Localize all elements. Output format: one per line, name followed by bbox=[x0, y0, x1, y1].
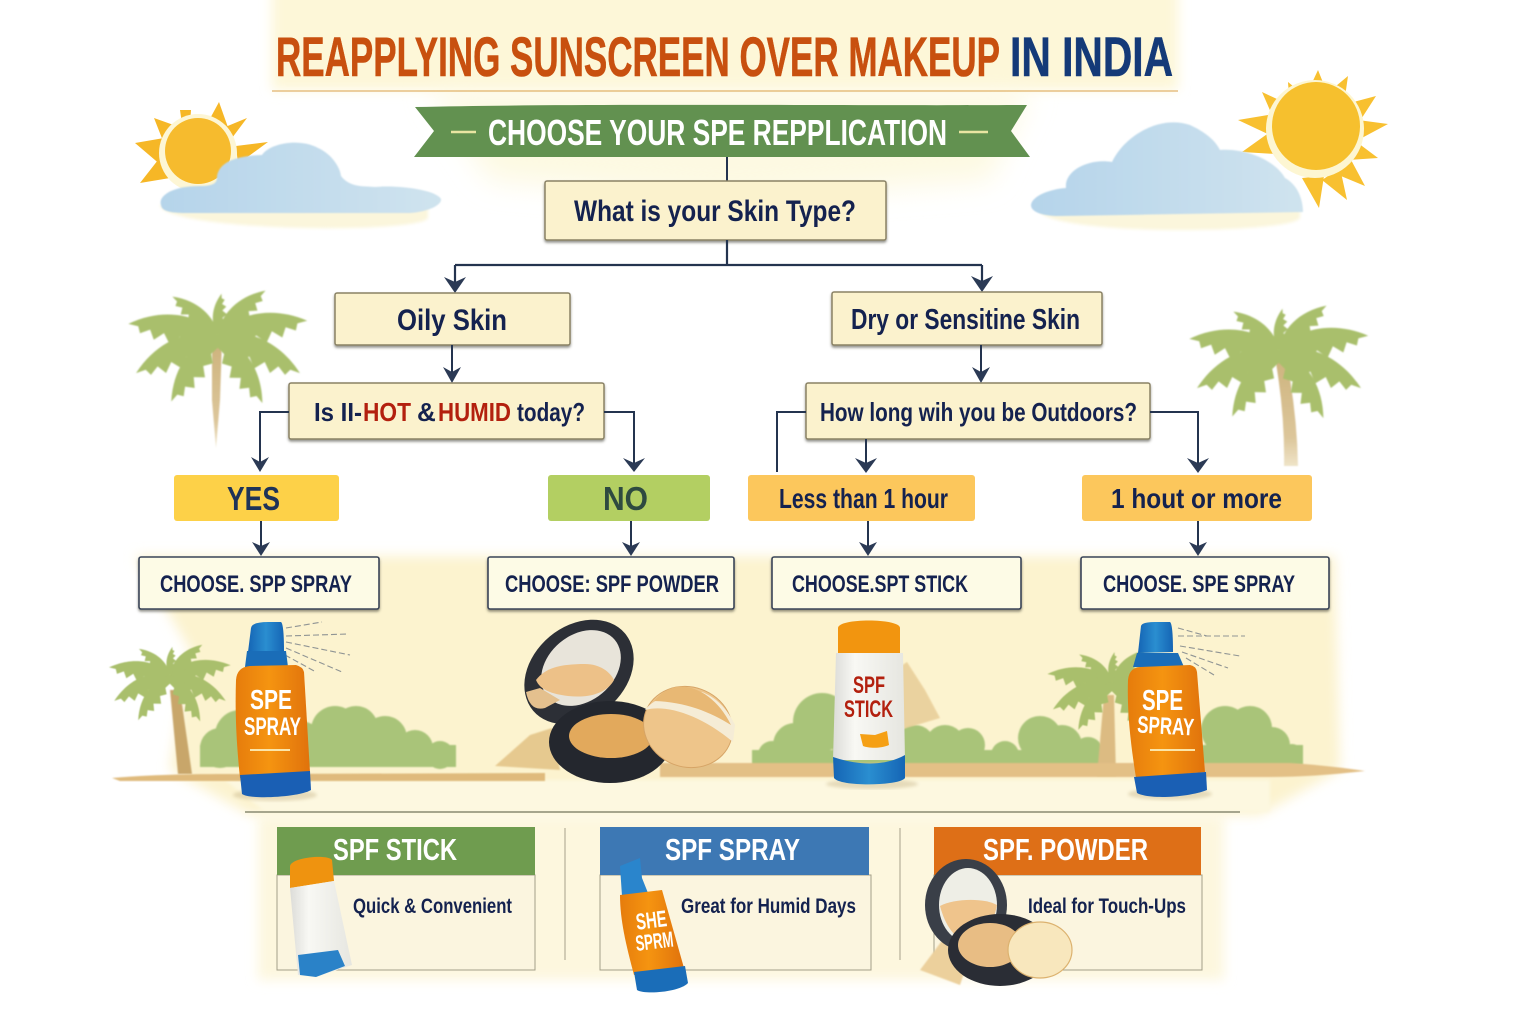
box: dry or sensitive skin: Dry or Sensitine Skin bbox=[851, 304, 1080, 336]
background wash: header bbox=[272, 0, 1178, 200]
result box: spray: CHOOSE. SPP SPRAY bbox=[160, 571, 352, 598]
result box: stick: CHOOSE.SPT STICK bbox=[792, 571, 968, 598]
result box: spray bbox=[139, 557, 379, 609]
product: powder compact bbox=[503, 598, 744, 783]
icon: right cloud bbox=[1031, 122, 1303, 230]
icon: palm tree upper right bbox=[1189, 299, 1370, 466]
arrow: to yes bbox=[251, 412, 289, 472]
label: no: NO bbox=[603, 480, 648, 517]
icon: compact bbox=[920, 859, 1072, 986]
box: dry or sensitive skin bbox=[832, 292, 1102, 345]
arrow: yes to spray bbox=[252, 521, 270, 556]
result box: stick bbox=[772, 557, 1021, 609]
icon: spray bbox=[620, 858, 688, 992]
shelf ledge bbox=[112, 728, 1365, 812]
label: less than 1 hour: Less than 1 hour bbox=[779, 483, 948, 514]
card: SPF spray bbox=[600, 827, 871, 992]
product: spray left: SPE bbox=[250, 684, 292, 715]
question box: hot and humid bbox=[289, 383, 604, 439]
question box: outdoors: How long wih you be Outdoors? bbox=[820, 397, 1137, 427]
dividers between summary cards bbox=[565, 828, 900, 960]
product: spray left: SPRAY bbox=[244, 713, 301, 741]
card: SPF powder: SPF. POWDER bbox=[983, 832, 1148, 867]
icon: stick bbox=[290, 857, 352, 977]
product: SPF stick bbox=[826, 620, 918, 789]
icon: spray: SPRM bbox=[634, 927, 675, 956]
arrow: oily to humid question bbox=[443, 345, 461, 383]
result box: spray right: CHOOSE. SPE SPRAY bbox=[1103, 571, 1295, 598]
icon: right sun bbox=[1238, 70, 1388, 208]
title: IN INDIA bbox=[1010, 25, 1173, 88]
result box: spray right bbox=[1081, 557, 1329, 609]
card: SPF spray: SPF SPRAY bbox=[665, 832, 800, 867]
title: REAPPLYING SUNSCREEN OVER MAKEUP bbox=[276, 25, 1000, 88]
result box: powder: CHOOSE: SPF POWDER bbox=[505, 571, 719, 598]
banner: choose your SPF application bbox=[414, 105, 1030, 157]
question box: skin type: What is your Skin Type? bbox=[574, 195, 856, 228]
card: SPF stick: Quick & Convenient bbox=[353, 895, 512, 918]
card: SPF stick bbox=[277, 827, 535, 977]
card: SPF powder bbox=[920, 827, 1202, 986]
arrow: skin type branches bbox=[444, 240, 993, 293]
card: SPF stick: SPF STICK bbox=[333, 832, 457, 867]
icon: left sun bbox=[135, 102, 268, 192]
icon: spray: SHE bbox=[634, 905, 668, 935]
question box: skin type bbox=[545, 181, 886, 240]
hill behind stick bbox=[895, 662, 940, 730]
arrow: no to powder bbox=[622, 521, 640, 556]
product: spray right bbox=[1128, 622, 1245, 800]
product: SPF stick: STICK bbox=[844, 696, 893, 723]
icon: palm tree lower left bbox=[109, 641, 232, 774]
arrow: less than hour to stick bbox=[859, 521, 877, 556]
icon: palm tree lower right bbox=[1047, 646, 1177, 776]
card: SPF powder: Ideal for Touch-Ups bbox=[1028, 895, 1186, 918]
product: SPF stick: SPF bbox=[853, 672, 885, 699]
card: SPF spray: Great for Humid Days bbox=[681, 895, 856, 918]
arrow: to 1 hour or more bbox=[1150, 412, 1209, 473]
product: spray right: SPRAY bbox=[1137, 712, 1195, 742]
label: 1 hour or more: 1 hout or more bbox=[1111, 483, 1282, 514]
label: 1 hour or more bbox=[1082, 475, 1312, 521]
background wash: landscape bbox=[135, 556, 1340, 815]
connector: banner to skin type question bbox=[726, 157, 728, 181]
connector: outdoors left line bbox=[777, 412, 806, 472]
question box: hot and humid: Is II- bbox=[314, 397, 362, 427]
question box: hot and humid: today? bbox=[517, 397, 585, 427]
label: no bbox=[548, 475, 710, 521]
arrow: more than hour to spray bbox=[1189, 521, 1207, 556]
background wash: bottom cards bbox=[258, 815, 1224, 980]
bushes bbox=[200, 693, 1303, 769]
icon: left cloud bbox=[160, 143, 441, 228]
arrow: dry to outdoors question bbox=[972, 345, 990, 383]
box: oily skin: Oily Skin bbox=[397, 304, 507, 337]
product: spray right: SPE bbox=[1142, 685, 1183, 717]
icon: palm tree upper left bbox=[128, 284, 309, 448]
question box: hot and humid: HUMID bbox=[438, 397, 511, 427]
box: oily skin bbox=[335, 293, 570, 345]
result box: powder bbox=[488, 557, 734, 609]
question box: outdoors bbox=[806, 383, 1150, 439]
label: less than 1 hour bbox=[748, 475, 975, 521]
label: yes bbox=[174, 475, 339, 521]
question box: hot and humid: HOT bbox=[363, 397, 411, 427]
arrow: to less than 1 hour bbox=[855, 439, 877, 473]
banner: choose your SPF application: CHOOSE YOUR SPE REPPLICATION bbox=[488, 112, 947, 153]
arrow: to no bbox=[604, 412, 645, 472]
product: spray left bbox=[233, 622, 350, 801]
label: yes: YES bbox=[227, 480, 280, 517]
question box: hot and humid: & bbox=[417, 397, 436, 427]
